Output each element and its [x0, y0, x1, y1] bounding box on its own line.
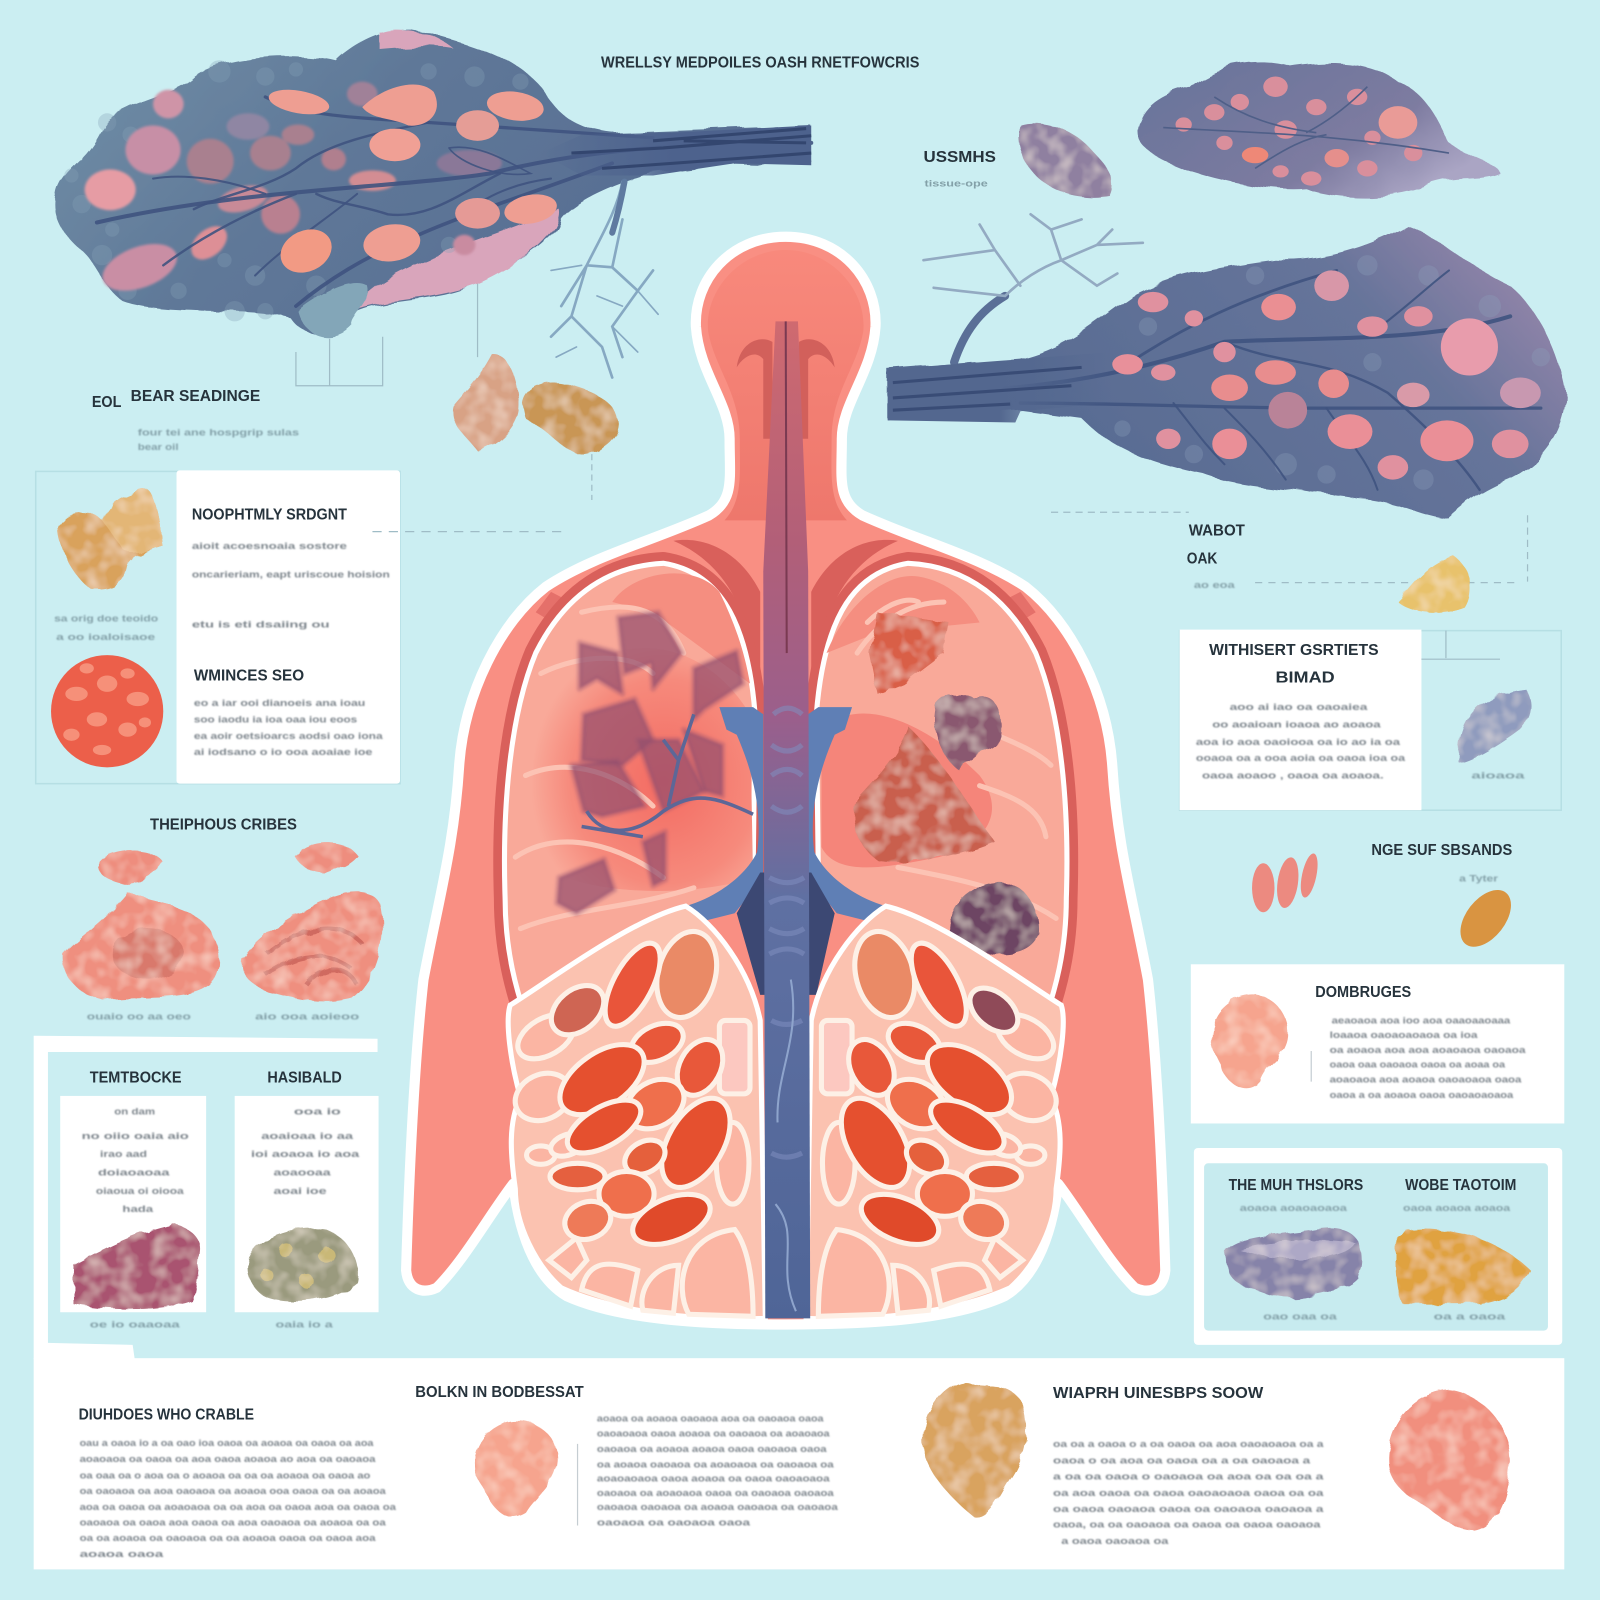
- text block: right top card: BIMAD: [1276, 670, 1335, 687]
- heading: top title: WRELLSY MEDPOILES OASH RNETFOWCRIS: [601, 54, 919, 71]
- label: right small note: NGE SUF SBSANDS: [1371, 842, 1512, 859]
- caption: left specimens: sa orig doe teoido: [54, 613, 159, 623]
- text block: left specimens card: ea aoir oetsioarcs aodsi oao iona: [194, 731, 384, 741]
- icon: coral lump left: [63, 851, 219, 1000]
- text block: right note card: oa aoaoa aoa aoa aoaoaoa oaoaoa: [1330, 1045, 1527, 1055]
- text block: right note card: aoaoaoa aoa aoaoa oaoaoaoa oaoa: [1330, 1075, 1523, 1085]
- mauve cells: [85, 82, 502, 300]
- icon: coral lump right: [242, 843, 382, 1001]
- text block: bottom left column: oa oaa oa o aoa oa o aoaoa oa oa oa aoaoa oa oaoa ao: [80, 1471, 371, 1481]
- icon: coral specimen: [1388, 1390, 1510, 1531]
- rib lobes: [515, 607, 694, 929]
- text block: bottom middle column: aoaoa oa aoaoa oaoaoa aoa oa oaoaoa oaoa: [597, 1413, 825, 1423]
- red core: [531, 648, 753, 891]
- central figure: dark mediastinum: [737, 872, 835, 995]
- illustration: top-right small lung: [1137, 62, 1500, 197]
- text block: left specimens card: soo iaodu ia ioa oaa iou eoos: [194, 714, 357, 724]
- text block: bottom middle column: BOLKN IN BODBESSAT: [415, 1384, 584, 1401]
- text block: left inner cards: on dam: [114, 1106, 155, 1116]
- text block: left inner cards: irao aad: [100, 1149, 147, 1159]
- text block: right top card: WITHISERT GSRTIETS: [1209, 642, 1379, 659]
- text block: bottom left column: oa oa aoaoa oa oaoaoa oa oa aoaoa oaoa oa oaoa aoa: [80, 1533, 377, 1543]
- text block: left inner cards: ioi aoaoa io aoa: [251, 1149, 361, 1159]
- label: top right note: USSMHS: [923, 149, 996, 166]
- text block: right note card: oaoa oaa oaoaoa oaoa oa aoaa oa: [1330, 1059, 1506, 1069]
- text block: right top card: aioaoa: [1471, 771, 1526, 781]
- icon: three pink drops: [1252, 852, 1321, 912]
- illustration: tan rocks: [452, 354, 618, 454]
- text block: bottom middle column: oaoaoa oa aoaoa aoaoa oaoa oaoaoa oaoa: [597, 1444, 828, 1454]
- text block: bottom left column: aoaoaoa oa oaoa oa aoa oaoa aoaoa ao aoa oa oaoaoa: [80, 1454, 377, 1464]
- text block: bottom middle column: aoaoaoaoa oaoa aoaoa oa oaoa oaoaoaoa: [597, 1474, 831, 1484]
- caption: left specimens: a oo ioaloisaoe: [56, 632, 155, 642]
- label: right small note: a Tyter: [1459, 874, 1499, 884]
- text block: bottom middle column: oaoaoaoa oaoa aoaoa oa oaoaoa oa aoaoaoa: [597, 1429, 831, 1439]
- illustration: branching airway above right lung: [923, 214, 1143, 362]
- central figure: right lower lobe: [806, 906, 1064, 1319]
- icon: pink lower specimen: [474, 1421, 557, 1517]
- icon: pink heart specimen: [1211, 995, 1288, 1088]
- icon: lavender stone: [1225, 1228, 1362, 1299]
- label: left note: four tei ane hospgrip sulas: [138, 428, 299, 438]
- text block: left specimens card: [192, 506, 390, 757]
- text block: right specimens frame: WOBE TAOTOIM: [1405, 1177, 1516, 1194]
- central figure: left lower lobe: [507, 906, 765, 1319]
- text block: bottom right column: oa aoa oaoa oa oaoa oaoaoaoa oaoa oa oa: [1053, 1488, 1325, 1498]
- text block: bottom right column: WIAPRH UINESBPS SOOW: [1053, 1385, 1264, 1402]
- central figure: body silhouette: [406, 237, 1165, 1324]
- right lung trunk: [888, 352, 1112, 422]
- central figure: left upper lung: [504, 563, 755, 1031]
- text block: bottom middle column: oaoaoa oa aoaoaoa oaoa oa oaoaoa oaoaoa: [597, 1488, 835, 1498]
- veins: [97, 97, 811, 306]
- text block: left inner cards: no oiio oaia aio: [82, 1131, 189, 1141]
- text block: bottom middle column: oaoaoa oa oaoaoa oaoa: [597, 1518, 751, 1528]
- panel: right specimens frame: [1194, 1148, 1562, 1345]
- text block: bottom left column: aoa oa oaoa oa aoaoaoa oa oa aoa oa oaoa aoa oa oaoa oa: [80, 1502, 397, 1512]
- panel: left frame with cards: [34, 1036, 379, 1359]
- head and neck shading: [708, 250, 864, 520]
- text block: right top card: aoa io aoa oaoiooa oa io ao ia oa: [1196, 737, 1401, 747]
- icon: blue rock: [1459, 689, 1531, 763]
- text block: bottom right column: a oa oa oaoa o oaoaoa oa aoa oa oa oa a: [1053, 1472, 1325, 1482]
- caption: left specimens: [54, 613, 159, 642]
- text block: left inner cards: [82, 1070, 361, 1330]
- text block: left inner cards: TEMTBOCKE: [90, 1070, 182, 1087]
- text block: left inner cards: aoaooaa: [273, 1168, 332, 1178]
- text block: left inner cards: oe io oaaoaa: [90, 1320, 181, 1330]
- text block: left inner cards: ooa io: [294, 1106, 341, 1116]
- text block: left inner cards: hada: [122, 1204, 154, 1214]
- label: right middle note: ao eoa: [1194, 580, 1236, 590]
- blue airway branches: [582, 714, 753, 837]
- text block: bottom middle column: oa aoaoa oaoaoa oa aoaoaoa oa oaoaoa oa: [597, 1459, 835, 1469]
- top lobe: [612, 573, 750, 684]
- right lung silhouette: [888, 227, 1566, 518]
- text block: bottom right column: oa oa a oaoa o a oa oaoa oa aoa oaoaoaoa oa a: [1053, 1439, 1325, 1449]
- text block: left specimens card: eo a iar ooi dianoeis ana ioau: [194, 698, 365, 708]
- text block: bottom left column: oa oaoaoa oa aoa oaoaoa oa aoaoa ooa oaoa oa oa aoaoa: [80, 1486, 387, 1496]
- text block: bottom right column: oa oaoa oaoaoa oaoa oa oaoaoa oaoaoa a: [1053, 1504, 1325, 1514]
- dark tumour: [949, 882, 1039, 954]
- label: top right note: tissue-ope: [924, 179, 988, 189]
- text block: right specimens frame: oaoa aoaoa aoaoa: [1403, 1203, 1511, 1213]
- lung silhouette: [55, 30, 811, 336]
- heading: coral lumps: THEIPHOUS CRIBES: [150, 817, 297, 834]
- text block: right top card: ooaoa oa a ooa aoia oa oaoa ioa oa: [1196, 753, 1406, 763]
- panel: right top card: [1180, 630, 1561, 810]
- text block: right specimens frame: aoaoa aoaoaoaoa: [1240, 1203, 1348, 1213]
- shoulder folds: [673, 540, 898, 714]
- text block: left inner cards: aoai ioe: [273, 1186, 327, 1196]
- text block: right specimens frame: oao oaa oa: [1263, 1311, 1338, 1321]
- text block: bottom right column: oaoa, oa oa oaoaoa oa oaoa oa oaoa oaoaoa: [1053, 1520, 1322, 1530]
- text block: bottom right column: oaoa o oa aoa oa oaoa oa a oa oaoaoa a: [1053, 1455, 1312, 1465]
- text block: left inner cards: HASIBALD: [267, 1070, 342, 1087]
- label: left note: BEAR SEADINGE: [131, 388, 260, 405]
- text block: right specimens frame: [1229, 1177, 1516, 1321]
- dark mauve cluster: [934, 694, 1001, 770]
- trunk: [541, 126, 811, 176]
- panel: bottom wide card: [34, 1358, 1564, 1569]
- icon: yellow rock: [1398, 556, 1470, 612]
- panel: left specimens card: [36, 470, 400, 784]
- icon: grey stone: [247, 1229, 358, 1302]
- icon: tan chunk: [58, 490, 163, 590]
- text block: right note card: aeaoaoa aoa ioo aoa oaaoaaoaaa: [1332, 1015, 1511, 1025]
- text block: left specimens card: NOOPHTMLY SRDGNT: [192, 506, 348, 523]
- dark leaf tree: [557, 612, 743, 913]
- text block: bottom right column: [1053, 1385, 1325, 1546]
- text block: right top card: oo aoaioan ioaoa ao aoaoa: [1212, 720, 1382, 730]
- small lung silhouette: [1137, 62, 1500, 197]
- icon: amber stone: [1395, 1229, 1531, 1304]
- text block: bottom right column: a oaoa oaoaoa oa: [1061, 1536, 1170, 1546]
- illustration: mauve rock: [1018, 123, 1113, 197]
- label: left note: bear oil: [138, 442, 179, 452]
- text block: bottom left column: aoaoa oaoa: [80, 1549, 165, 1559]
- central figure: bronchi: [686, 707, 886, 923]
- throat arches: [737, 339, 835, 439]
- text block: right top card: oaoa aoaoo , oaoa oa aoaoa.: [1202, 771, 1384, 781]
- central figure: spine and trachea: [763, 321, 810, 1318]
- label: right middle note: OAK: [1187, 550, 1217, 567]
- heading: coral lumps: ouaio oo aa oeo: [87, 1011, 191, 1021]
- text block: right note card: loaaoa oaoaoaoaoa oa ioa: [1330, 1030, 1479, 1040]
- text block: right top card: aoo ai iao oa oaoaiea: [1230, 702, 1369, 712]
- text block: right top card: [1196, 642, 1526, 781]
- label: left note: EOL: [92, 394, 121, 411]
- label: left note: [92, 388, 299, 452]
- text block: left specimens card: oncarieriam, eapt uriscoue hoision: [192, 570, 390, 580]
- text block: bottom middle column: [415, 1384, 839, 1528]
- text block: right note card: DOMBRUGES: [1315, 984, 1411, 1001]
- panel: right note card: [1191, 964, 1564, 1123]
- icon: red round specimen: [51, 655, 163, 767]
- text block: bottom left column: oaoaoa oa oaoa aoa oaoa oa aoa oaoaoa oa aoaoa oa oa: [80, 1518, 387, 1528]
- illustration: branching airway below top-left lung: [551, 182, 658, 378]
- label: right middle note: WABOT: [1189, 523, 1246, 540]
- connector lines: [296, 260, 1528, 1526]
- icon: tan heart specimen: [922, 1382, 1027, 1518]
- heading: coral lumps: aio ooa aoieoo: [255, 1011, 360, 1021]
- label: right small note: [1371, 842, 1512, 884]
- icon: orange pebble: [1450, 881, 1521, 956]
- label: top right note: [923, 149, 996, 189]
- text block: bottom left column: oau a oaoa io a oa oao ioa oaoa oa aoaoa oa oaoa oa aoa: [80, 1438, 375, 1448]
- salmon nodules: [267, 84, 559, 281]
- text block: left inner cards: oaia io a: [276, 1320, 334, 1330]
- text block: left specimens card: ai iodsano o io ooa aoaiae ioe: [194, 747, 372, 757]
- right lung nodules: [1112, 270, 1541, 480]
- text block: bottom left column: [79, 1406, 397, 1559]
- text block: right specimens frame: THE MUH THSLORS: [1229, 1177, 1363, 1194]
- red-brown tumour: [869, 612, 949, 694]
- text block: left specimens card: etu is eti dsaiing ou: [192, 620, 330, 630]
- text block: left inner cards: aoaioaa io aa: [261, 1131, 354, 1141]
- text block: right specimens frame: oa a oaoa: [1434, 1311, 1507, 1321]
- illustration: large right lung: [888, 227, 1566, 518]
- illustration: top-left lung: [55, 30, 811, 336]
- icon: purple stone: [73, 1224, 200, 1309]
- text block: left specimens card: aioit acoesnoaia sostore: [192, 541, 347, 551]
- text block: left inner cards: doiaoaoaa: [98, 1168, 171, 1178]
- text block: left inner cards: oiaoua oi oiooa: [96, 1186, 185, 1196]
- heading: coral lumps: [87, 817, 360, 1021]
- large brown mass: [854, 727, 995, 862]
- label: right middle note: [1187, 523, 1246, 590]
- text block: left specimens card: WMINCES SEO: [194, 668, 304, 685]
- central figure: right upper lung: [816, 563, 1067, 1031]
- mottled small cells: [64, 60, 529, 321]
- text block: right note card: oaoa a oa aoaoa oaoa oaoaoaoaoa: [1330, 1090, 1514, 1100]
- text block: bottom left column: DIUHDOES WHO CRABLE: [79, 1406, 254, 1423]
- text block: bottom middle column: oaoaoa oaoaoa oa aoaoa oaoaoa oa oaoaoa: [597, 1502, 839, 1512]
- text block: right note card: [1315, 984, 1527, 1100]
